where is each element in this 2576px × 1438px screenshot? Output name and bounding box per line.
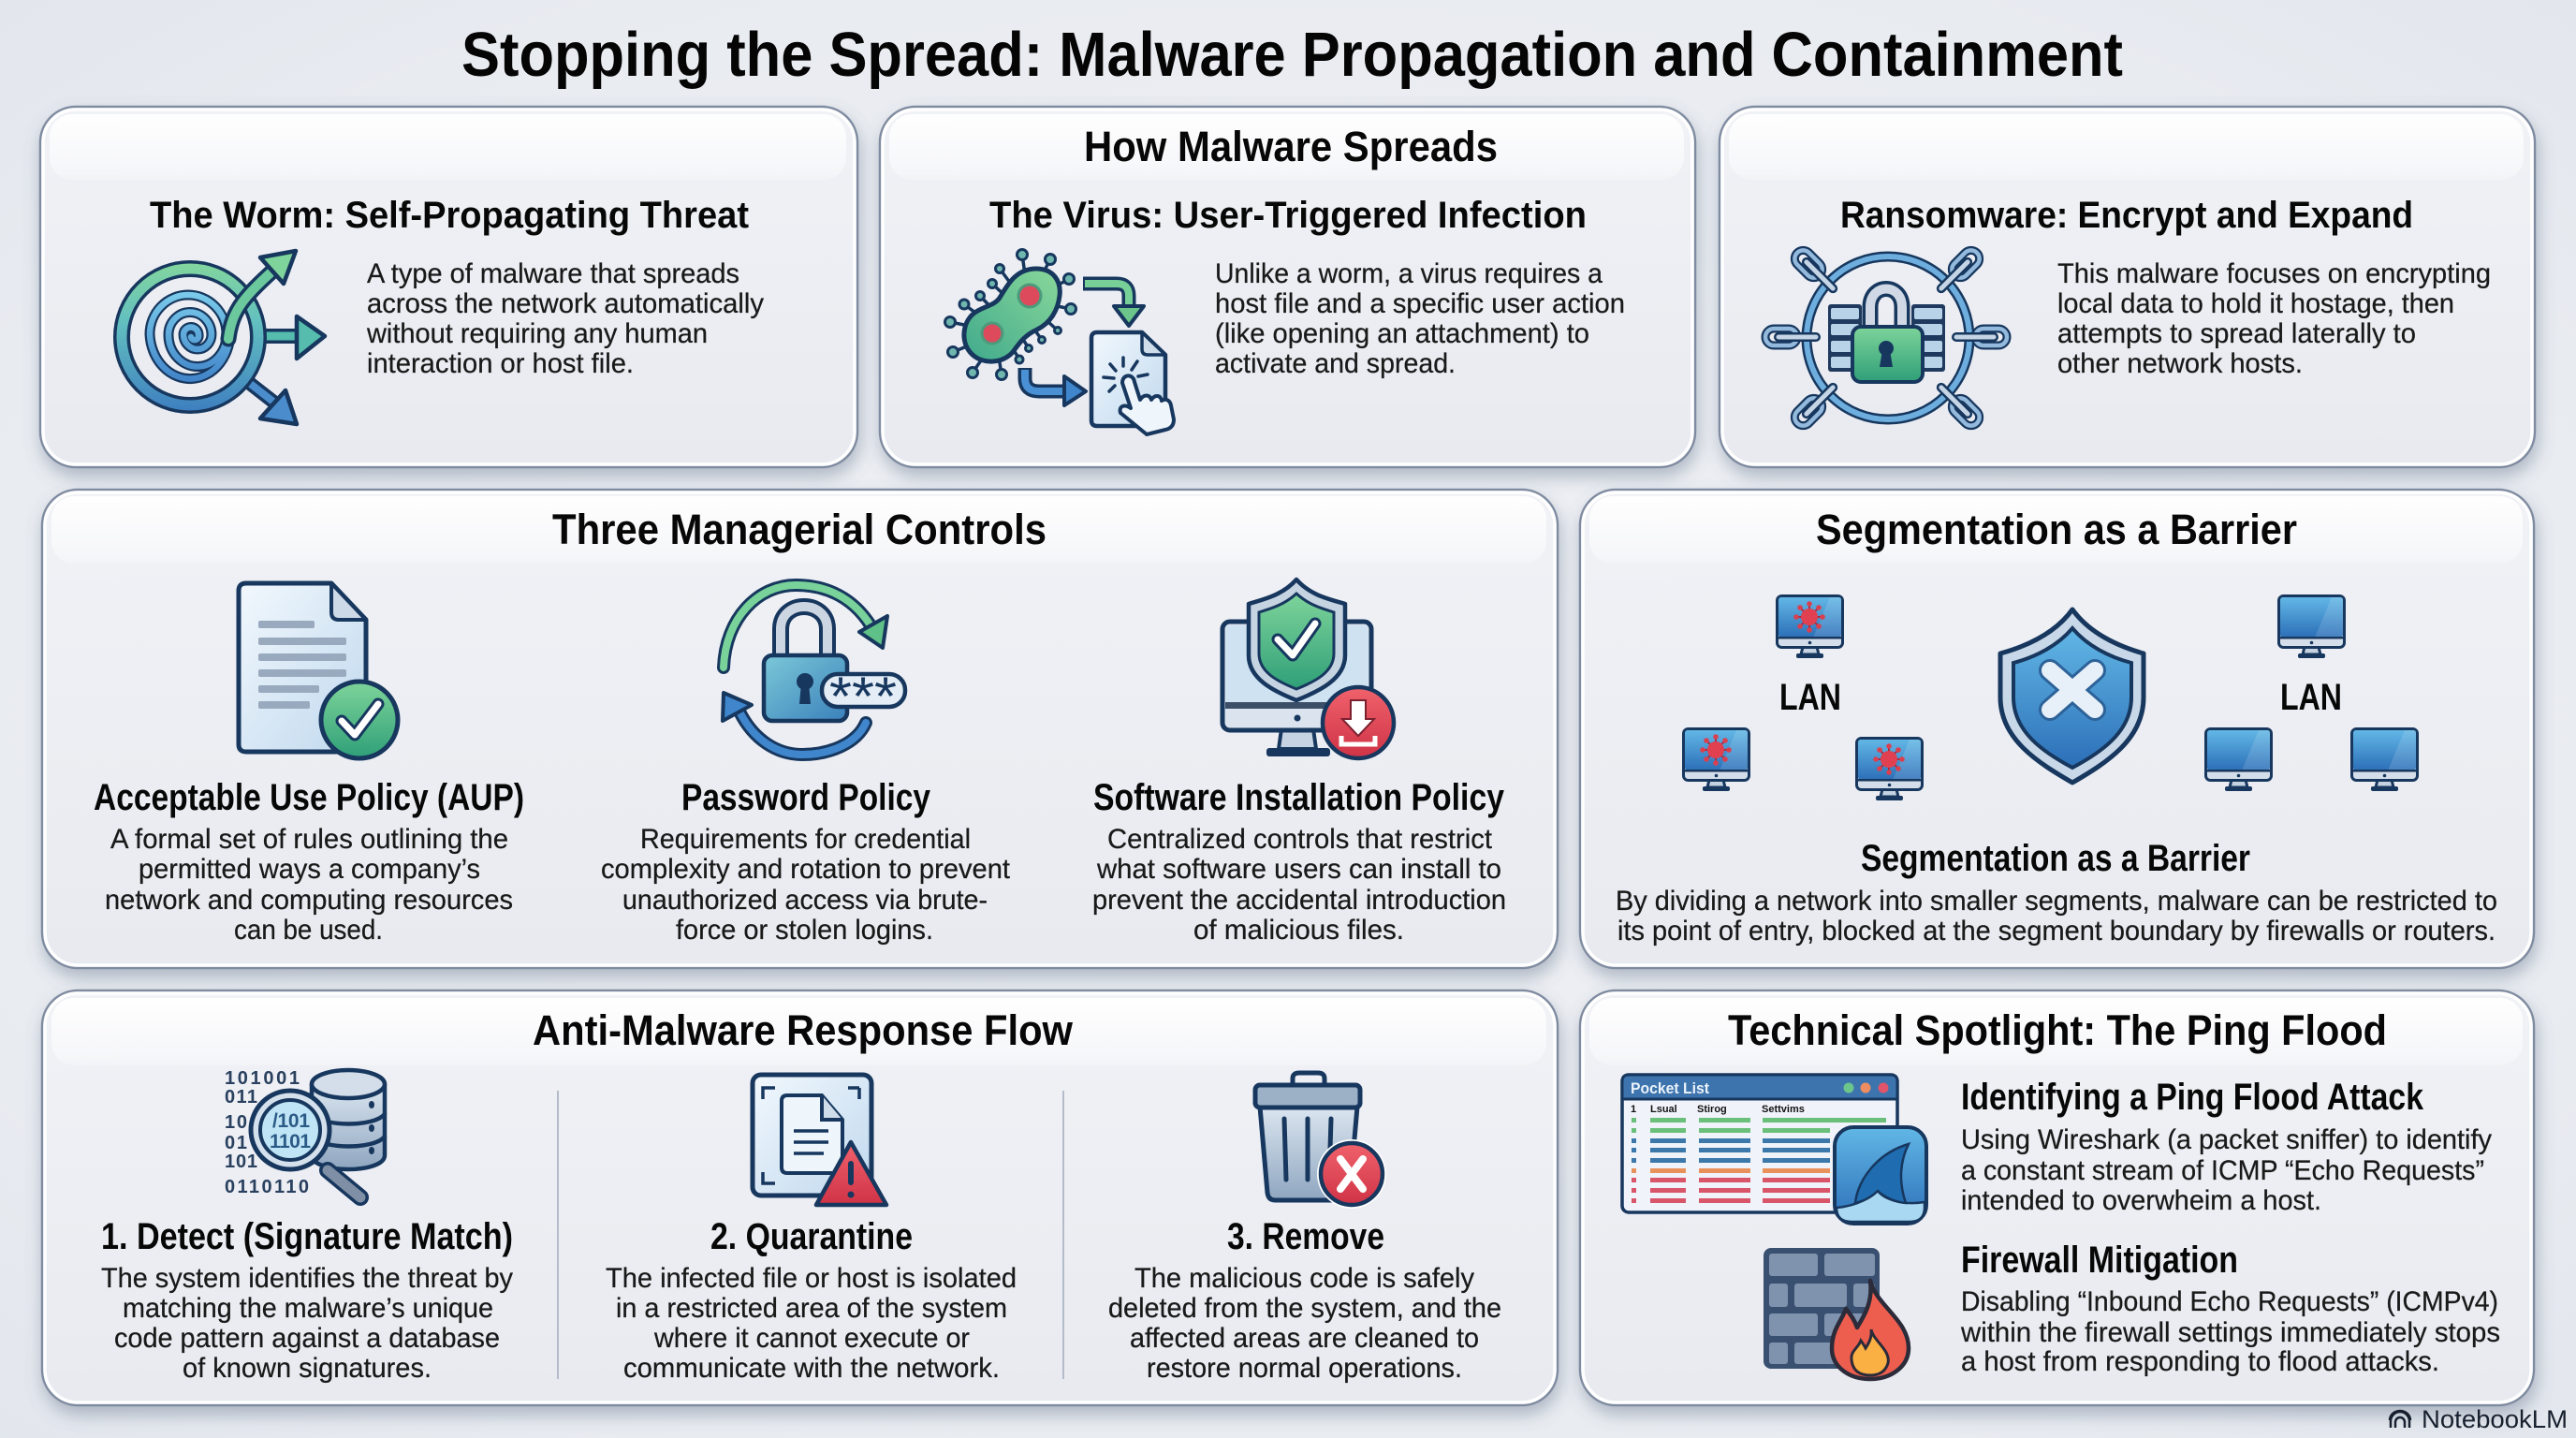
text: remove description: affected areas are cleaned to	[1130, 1323, 1479, 1354]
heading: password policy: Password Policy	[681, 777, 931, 818]
text: software description: of malicious files.	[1193, 915, 1404, 946]
icon: packet list window with shark: Lsual	[1650, 1104, 1677, 1115]
text: quarantine description: where it cannot execute or	[653, 1323, 970, 1354]
panel: worm	[40, 107, 857, 467]
icon: trash can with delete badge	[1255, 1073, 1386, 1209]
text: password description: force or stolen logins.	[676, 915, 933, 946]
text: AUP description	[105, 824, 513, 946]
icon: magnifier over database and binary: 011	[225, 1087, 257, 1108]
heading: worm: The Worm: Self-Propagating Threat	[150, 195, 749, 236]
text: detect description: of known signatures.	[183, 1353, 432, 1384]
icon: computer right	[2351, 728, 2417, 791]
heading: identifying a ping flood attack: Identifying a Ping Flood Attack	[1961, 1077, 2424, 1118]
panel: ransomware	[1720, 107, 2535, 467]
text: virus description: (like opening an attachment) to	[1215, 318, 1589, 349]
heading: AUP: Acceptable Use Policy (AUP)	[94, 777, 524, 818]
text: firewall description	[1960, 1286, 2500, 1377]
text: detect description: matching the malware’s unique	[123, 1293, 493, 1324]
text: ransomware description: attempts to spread laterally to	[2057, 318, 2416, 349]
title: Stopping the Spread: Malware Propagation and Containment	[461, 20, 2123, 90]
text: quarantine description: communicate with the network.	[623, 1353, 1000, 1384]
icon: quarantined file with warning	[753, 1075, 886, 1205]
heading: three managerial controls: Three Managerial Controls	[552, 506, 1046, 553]
text: worm description: across the network automatically	[367, 288, 764, 319]
text: ransomware description: other network hosts.	[2057, 348, 2303, 379]
icon: packet list window with shark: Pocket List	[1631, 1079, 1709, 1097]
text: ping flood description	[1961, 1124, 2492, 1216]
icon: lock with rotation arrows	[723, 585, 905, 755]
text: detect description: The system identifies the threat by	[101, 1263, 513, 1294]
diagram: protected LAN	[2205, 595, 2417, 791]
text: segmentation description: By dividing a network into smaller segments, malware can be restricted to	[1616, 886, 2497, 917]
text: virus description	[1215, 258, 1625, 379]
text: quarantine description: in a restricted area of the system	[616, 1293, 1007, 1324]
text: worm description: without requiring any human	[366, 318, 708, 349]
text: remove description: The malicious code is safely	[1134, 1263, 1474, 1294]
text: software description: prevent the accidental introduction	[1092, 885, 1506, 916]
text: worm description	[366, 258, 764, 379]
icon: monitor with shield and download	[1222, 580, 1394, 758]
text: ransomware description	[2057, 258, 2491, 379]
text: segmentation description	[1616, 886, 2497, 946]
text: quarantine description: The infected file or host is isolated	[606, 1263, 1017, 1294]
heading: how malware spreads: How Malware Spreads	[1084, 123, 1498, 170]
text: detect description: code pattern against a database	[114, 1323, 500, 1354]
icon: infected computer right	[1857, 738, 1923, 800]
icon: magnifier over database and binary	[225, 1068, 385, 1197]
text: quarantine description	[606, 1263, 1017, 1384]
text: virus description: host file and a specific user action	[1215, 288, 1625, 319]
heading: software installation policy: Software Installation Policy	[1093, 777, 1505, 818]
icon: computer left	[2205, 728, 2271, 791]
text: virus description: Unlike a worm, a virus requires a	[1215, 258, 1603, 289]
control: password policy	[601, 585, 1011, 946]
icon: infected computer top	[1777, 595, 1842, 658]
icon: magnifier over database and binary: 10	[225, 1112, 247, 1133]
icon: packet list window with shark	[1622, 1075, 1926, 1224]
heading: remove: 3. Remove	[1227, 1216, 1384, 1257]
text: password description	[601, 824, 1011, 946]
heading: segmentation as a barrier: Segmentation as a Barrier	[1816, 506, 2297, 553]
icon: magnifier over database and binary: 01	[225, 1133, 247, 1153]
diagram: infected LAN	[1683, 595, 1923, 800]
heading: firewall mitigation: Firewall Mitigation	[1961, 1240, 2238, 1281]
heading: anti-malware response flow: Anti-Malware Response Flow	[533, 1006, 1074, 1054]
panel: anti-malware response flow	[42, 990, 1558, 1405]
label: LAN right: LAN	[2280, 677, 2342, 718]
icon: lock with rotation arrows: ***	[829, 667, 897, 727]
text: remove description: deleted from the system, and the	[1108, 1293, 1501, 1324]
text: worm description: interaction or host file.	[367, 348, 634, 379]
icon: worm spiral with arrows	[122, 251, 325, 424]
panel: virus	[880, 107, 1695, 467]
step 3: remove	[1108, 1073, 1501, 1384]
icon: magnifier over database and binary: 101	[225, 1152, 257, 1172]
icon: computer top	[2278, 595, 2344, 658]
heading: segmentation sub-heading: Segmentation as a Barrier	[1861, 838, 2250, 879]
heading: ransomware: Ransomware: Encrypt and Expand	[1840, 195, 2413, 236]
icon: packet list window with shark: Stirog	[1697, 1104, 1727, 1115]
icon: magnifier over database and binary: 1101	[270, 1131, 311, 1152]
icon: magnifier over database and binary: 0110110	[225, 1177, 309, 1197]
logo: NotebookLM: NotebookLM	[2422, 1405, 2568, 1433]
text: password description: Requirements for credential	[640, 824, 971, 855]
text: AUP description: network and computing resources	[105, 885, 513, 916]
text: AUP description: A formal set of rules outlining the	[110, 824, 508, 855]
text: segmentation description: its point of entry, blocked at the segment boundary by firewalls or routers.	[1617, 916, 2496, 946]
text: software description: what software users can install to	[1096, 854, 1501, 885]
step 2: quarantine	[606, 1075, 1017, 1384]
label: LAN left: LAN	[1779, 677, 1841, 718]
icon: packet list window with shark: Settvims	[1762, 1104, 1805, 1115]
icon: firewall with flame	[1764, 1248, 1909, 1379]
icon: encrypted lock with chains	[1765, 247, 2007, 429]
icon: virus and file click	[945, 249, 1174, 434]
panel: segmentation	[1580, 490, 2534, 968]
text: password description: unauthorized access via brute-	[622, 885, 988, 916]
icon: blocking shield	[2000, 609, 2144, 783]
icon: magnifier over database and binary: /101	[272, 1110, 310, 1132]
icon: infected computer left	[1683, 728, 1749, 791]
panel: technical spotlight	[1580, 990, 2534, 1405]
text: software description	[1092, 824, 1506, 946]
heading: virus: The Virus: User-Triggered Infection	[989, 195, 1587, 236]
text: firewall description: a host from responding to flood attacks.	[1961, 1346, 2439, 1377]
step 1: detect	[101, 1068, 513, 1384]
text: detect description	[101, 1263, 513, 1384]
icon: policy document with check	[239, 583, 398, 758]
text: firewall description: within the firewall settings immediately stops	[1960, 1317, 2500, 1348]
text: ransomware description: local data to hold it hostage, then	[2057, 288, 2454, 319]
text: remove description: restore normal operations.	[1147, 1353, 1462, 1384]
control: software installation policy	[1092, 580, 1506, 946]
heading: quarantine: 2. Quarantine	[710, 1216, 913, 1257]
text: AUP description: permitted ways a company’s	[139, 854, 480, 885]
icon: packet list window with shark: 1	[1631, 1104, 1636, 1115]
heading: technical spotlight: Technical Spotlight: The Ping Flood	[1728, 1006, 2387, 1054]
panel: three managerial controls	[42, 490, 1558, 968]
text: worm description: A type of malware that spreads	[367, 258, 739, 289]
text: ping flood description: Using Wireshark (a packet sniffer) to identify	[1961, 1124, 2492, 1155]
text: password description: complexity and rotation to prevent	[601, 854, 1011, 885]
text: AUP description: can be used.	[234, 915, 383, 946]
text: ransomware description: This malware focuses on encrypting	[2057, 258, 2491, 289]
heading: detect: 1. Detect (Signature Match)	[101, 1216, 513, 1257]
text: ping flood description: a constant stream of ICMP “Echo Requests”	[1961, 1155, 2484, 1186]
text: ping flood description: intended to overwheim a host.	[1961, 1185, 2321, 1216]
text: remove description	[1108, 1263, 1501, 1384]
icon: magnifier over database and binary: 101001	[225, 1068, 300, 1089]
text: firewall description: Disabling “Inbound Echo Requests” (ICMPv4)	[1961, 1286, 2498, 1317]
text: virus description: activate and spread.	[1215, 348, 1456, 379]
text: software description: Centralized controls that restrict	[1107, 824, 1493, 855]
control: acceptable use policy	[94, 583, 524, 946]
